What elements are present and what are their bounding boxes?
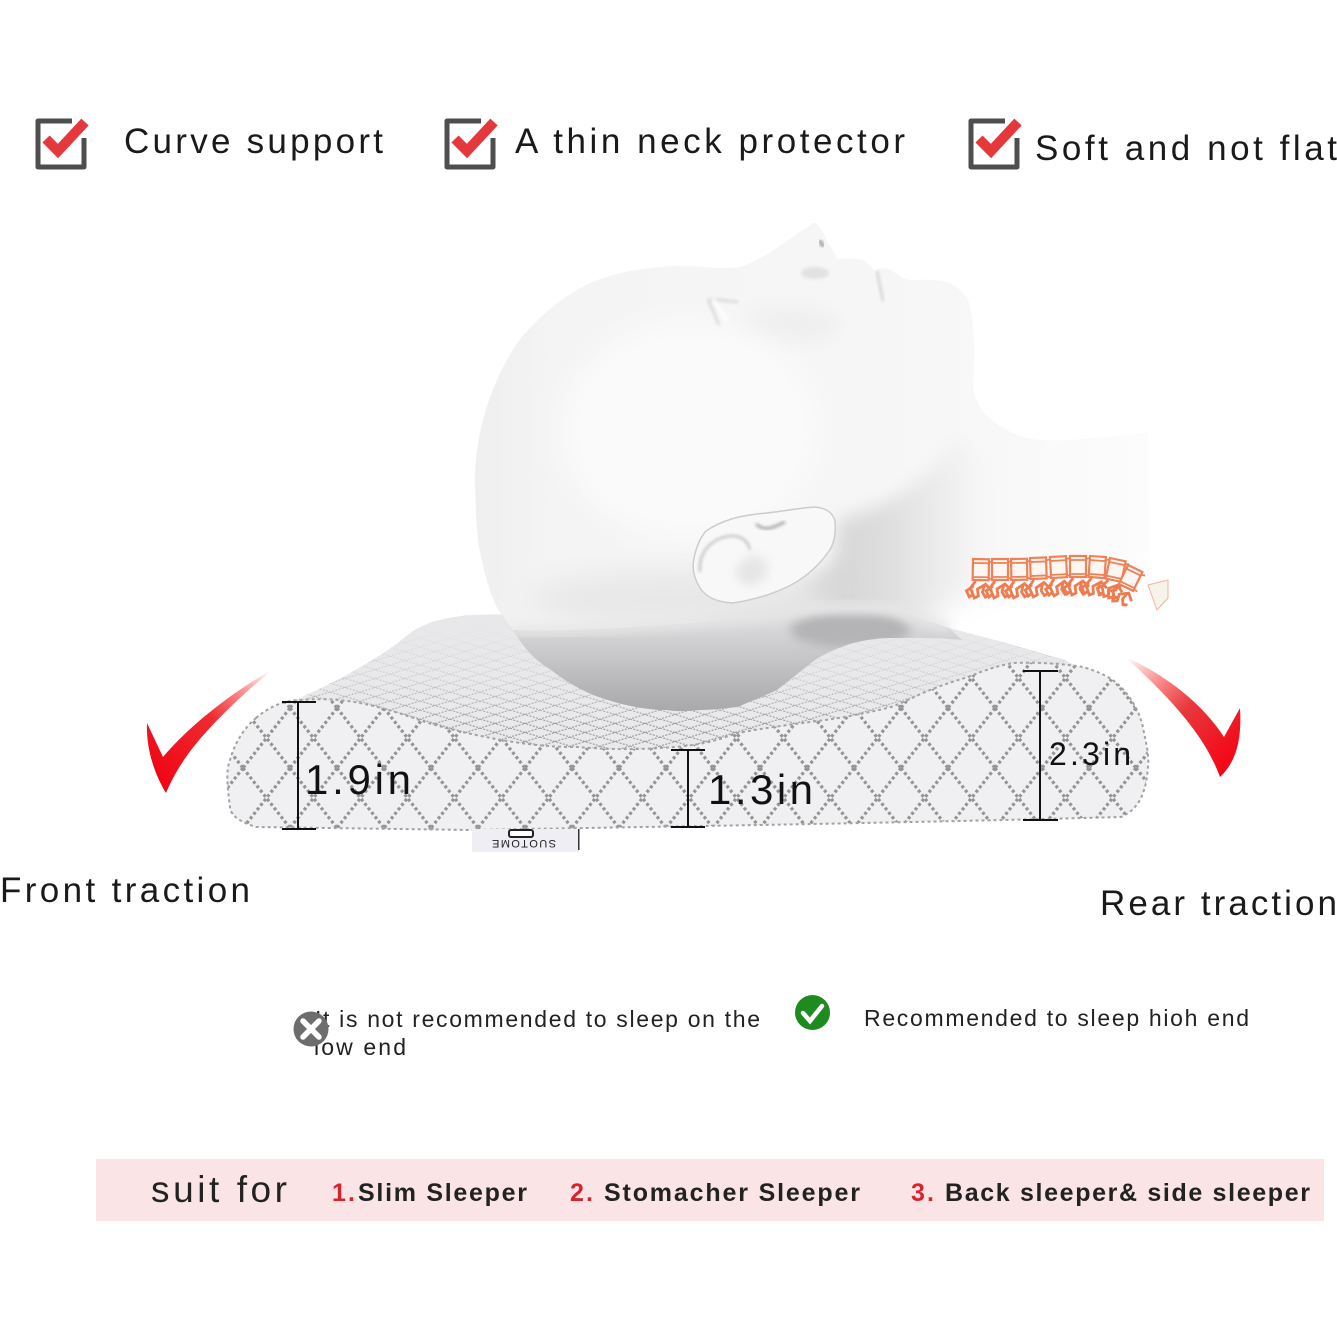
icon: checkbox 2: [447, 121, 494, 167]
note: recommended: [795, 995, 1249, 1031]
text: low end warning: [314, 1006, 760, 1060]
soft head-to-shadow transition: [513, 607, 949, 630]
measurement: front height 1.9in: [282, 702, 411, 829]
measurement: front height 1.9in: 1.9in: [305, 756, 411, 803]
icon: gray cross: [294, 1012, 328, 1046]
text: low end warning: low end: [314, 1034, 406, 1060]
measurement: center height 1.3in: [671, 750, 813, 827]
pillow label tag: SUOTOME: [492, 837, 556, 849]
text: soft and not flat: Soft and not flat: [1035, 129, 1337, 168]
text: thin neck protector: A thin neck protector: [515, 122, 905, 161]
measurement: center height 1.3in: 1.3in: [708, 766, 813, 813]
pillow front face with diamond quilting: [227, 663, 1148, 830]
item 3: back and side sleeper: 3.: [911, 1179, 934, 1207]
item 2: stomacher sleeper: 2.: [570, 1179, 593, 1207]
checklist item: soft and not flat: [971, 121, 1337, 168]
head and neck illustration: [475, 223, 988, 712]
heading: suit for: suit for: [151, 1169, 287, 1210]
jaw and under-ear shading: [530, 307, 1000, 640]
item 3: back and side sleeper: Back sleeper& side sleeper: [945, 1179, 1310, 1207]
pillow label tag: [472, 829, 580, 852]
note: not recommended: [294, 1006, 760, 1060]
head and neck silhouette: [475, 223, 988, 630]
head shadow over pillow: [497, 600, 962, 711]
checklist item: thin neck protector: [447, 121, 905, 167]
label: front traction: Front traction: [0, 871, 250, 910]
text: low end warning: It is not recommended to sleep on the: [315, 1006, 760, 1032]
measurement: rear height 2.3in: 2.3in: [1049, 736, 1131, 772]
item 2: stomacher sleeper: Stomacher Sleeper: [604, 1179, 860, 1207]
pillow top surface: [256, 607, 1130, 790]
icon: green check: [795, 995, 830, 1030]
item 1: slim sleeper: Slim Sleeper: [358, 1179, 527, 1207]
icon: checkbox 3: [971, 121, 1018, 167]
text: curve support: Curve support: [124, 122, 383, 161]
measurement: rear height 2.3in: [1023, 671, 1131, 820]
arrow: front traction check: [147, 670, 272, 793]
item 1: slim sleeper: 1.: [332, 1179, 355, 1207]
arrow: rear traction check: [1125, 657, 1240, 777]
label: rear traction: Rear traction: [1100, 884, 1337, 923]
nostril and nose shading: [801, 241, 829, 279]
spine illustration: [966, 556, 1168, 610]
mouth: [877, 271, 883, 301]
checklist item: curve support: [38, 121, 383, 167]
icon: checkbox 1: [38, 121, 85, 167]
banner: suit for: [96, 1159, 1324, 1221]
eye slit: [708, 299, 738, 325]
pillow: [227, 607, 1148, 852]
ear: [693, 507, 835, 603]
text: recommended high end: Recommended to sleep hioh end: [864, 1005, 1249, 1031]
